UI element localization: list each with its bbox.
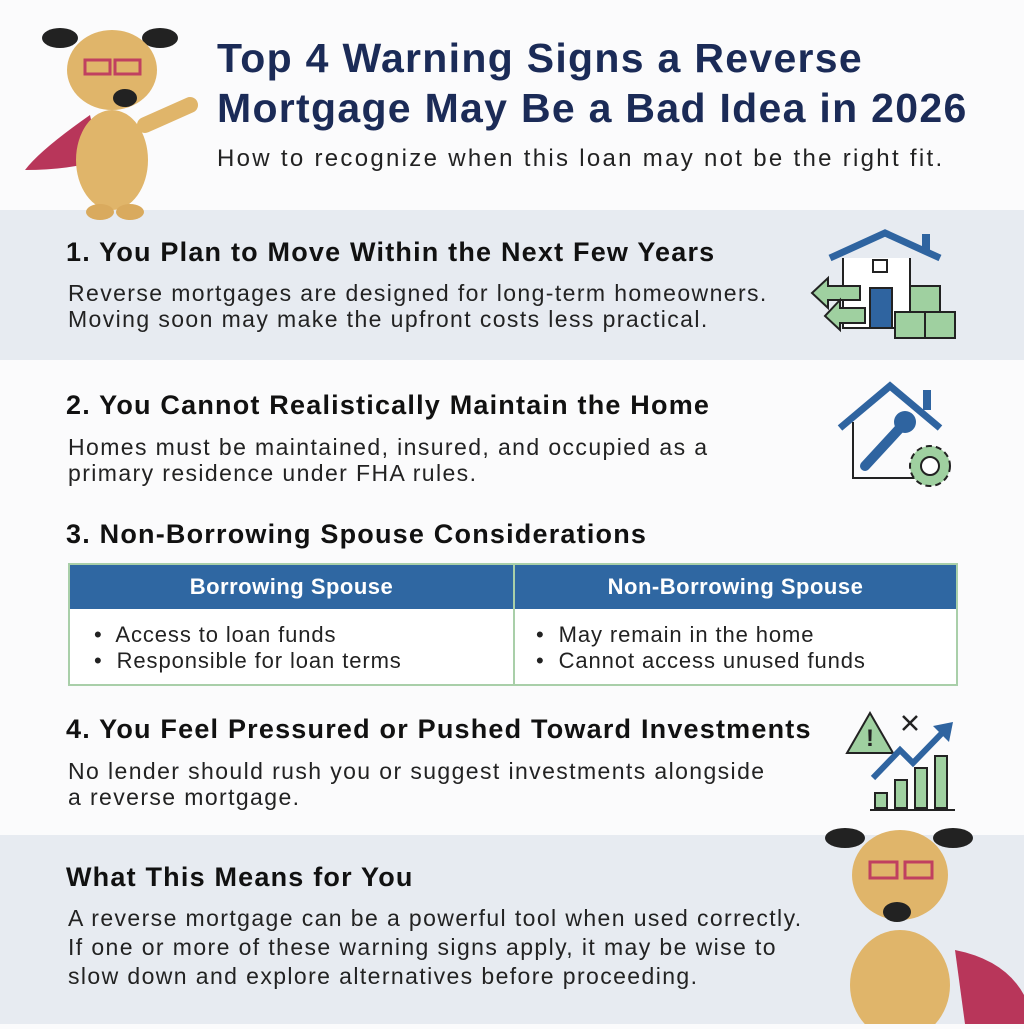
- icon: house wrench gear: [838, 382, 951, 487]
- text 1: [68, 280, 768, 332]
- title: Top 4 Warning Signs a Reverse: [217, 35, 863, 81]
- heading 1: 1. You Plan to Move Within the Next Few Years: [66, 237, 715, 267]
- icon: house moving: [810, 229, 956, 339]
- mascot bottom: [825, 828, 1024, 1024]
- text: summary: If one or more of these warning signs apply, it may be wise to: [68, 934, 777, 960]
- list: borrowing: • Responsible for loan terms: [94, 648, 402, 673]
- text 1: Reverse mortgages are designed for long-term homeowners.: [68, 280, 768, 306]
- text 2: [68, 434, 708, 486]
- table: spouse comparison: [68, 563, 958, 686]
- text 4: [68, 758, 765, 810]
- title: Mortgage May Be a Bad Idea in 2026: [217, 85, 968, 131]
- heading 2: 2. You Cannot Realistically Maintain the Home: [66, 390, 710, 420]
- heading 3: 3. Non-Borrowing Spouse Considerations: [66, 519, 647, 549]
- text: summary: [68, 905, 803, 989]
- band: section 1 background: [0, 210, 1024, 360]
- text: summary: slow down and explore alternatives before proceeding.: [68, 963, 698, 989]
- title: [217, 35, 968, 131]
- header: non-borrowing: Non-Borrowing Spouse: [608, 574, 863, 599]
- band: bottom summary background: [0, 835, 1024, 1024]
- list: non-borrowing: [536, 622, 866, 673]
- header: non-borrowing: [515, 565, 956, 609]
- subtitle: How to recognize when this loan may not be the right fit.: [217, 145, 944, 172]
- icon: warning chart: !: [866, 725, 874, 752]
- list: borrowing: • Access to loan funds: [94, 622, 336, 647]
- header: borrowing: [70, 565, 513, 609]
- text 1: Moving soon may make the upfront costs less practical.: [68, 306, 709, 332]
- text 2: primary residence under FHA rules.: [68, 460, 477, 486]
- text: summary: A reverse mortgage can be a powerful tool when used correctly.: [68, 905, 803, 931]
- header: borrowing: Borrowing Spouse: [190, 574, 393, 599]
- list: non-borrowing: • Cannot access unused funds: [536, 648, 866, 673]
- text 4: a reverse mortgage.: [68, 784, 300, 810]
- icon: warning chart: [845, 711, 955, 811]
- list: borrowing: [94, 622, 402, 673]
- text 2: Homes must be maintained, insured, and occupied as a: [68, 434, 708, 460]
- text 4: No lender should rush you or suggest investments alongside: [68, 758, 765, 784]
- heading: what this means: What This Means for You: [66, 862, 414, 892]
- list: non-borrowing: • May remain in the home: [536, 622, 814, 647]
- mascot top: [25, 28, 198, 220]
- heading 4: 4. You Feel Pressured or Pushed Toward Investments: [66, 714, 812, 744]
